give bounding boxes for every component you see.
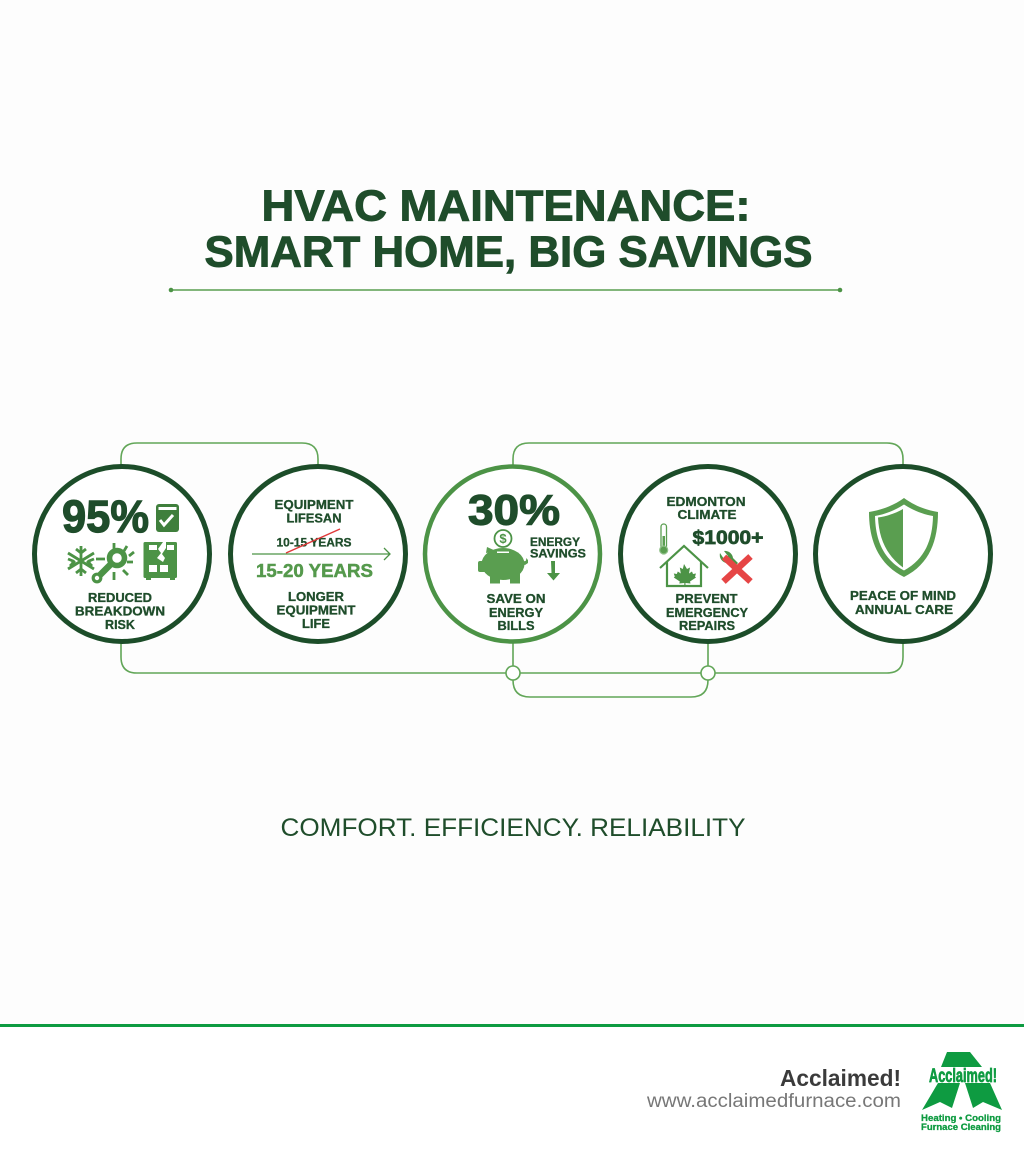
logo: Heating • Cooling: [921, 1113, 1001, 1124]
caption: PEACE OF MIND: [850, 589, 956, 603]
title underline: [169, 288, 842, 292]
old lifespan struck through: [276, 529, 352, 553]
label: energy savings: [530, 537, 586, 560]
icon: snowflake: [68, 546, 94, 576]
heading: [666, 495, 746, 522]
caption: [486, 592, 546, 633]
caption: [276, 590, 356, 631]
title: SMART HOME, BIG SAVINGS: [204, 228, 812, 276]
panel: peace of mind: [816, 466, 990, 642]
logo: [921, 1052, 1002, 1133]
caption: LONGER: [288, 590, 344, 604]
footer: [0, 1024, 1024, 1154]
icon: checklist: [156, 504, 179, 532]
panel: longer equipment life: [230, 466, 406, 642]
caption: ANNUAL CARE: [855, 603, 953, 617]
icon: dollar coin: [494, 530, 512, 547]
icon: piggy bank: [478, 547, 528, 584]
logo: Furnace Cleaning: [921, 1122, 1001, 1133]
tagline: COMFORT. EFFICIENCY. RELIABILITY: [280, 814, 746, 842]
caption: [850, 589, 956, 617]
caption: [75, 591, 165, 632]
title: [204, 182, 812, 276]
heading: LIFESAN: [286, 512, 342, 526]
connector lines: [121, 443, 903, 697]
arrow: [252, 548, 390, 560]
caption: LIFE: [302, 617, 330, 631]
caption: BREAKDOWN: [75, 604, 165, 618]
panel: prevent emergency repairs: [620, 466, 796, 642]
icon: shield: [869, 498, 938, 577]
stat: 30%: 30%: [468, 486, 560, 534]
stat: 95%: 95%: [62, 491, 149, 542]
heading: [274, 498, 354, 526]
brand name: Acclaimed!: [780, 1065, 901, 1091]
label: energy savings: SAVINGS: [530, 548, 586, 560]
heading: CLIMATE: [678, 508, 736, 522]
caption: REPAIRS: [679, 619, 735, 633]
icon: dollar coin: $: [499, 531, 507, 546]
caption: ENERGY: [489, 606, 544, 620]
website: www.acclaimedfurnace.com: [646, 1091, 901, 1112]
icon: house with maple leaf: [660, 546, 708, 587]
icon: down arrow: [547, 561, 560, 580]
caption: [666, 592, 749, 633]
title: HVAC MAINTENANCE:: [262, 182, 750, 230]
caption: PREVENT: [676, 592, 738, 606]
caption: EQUIPMENT: [276, 604, 356, 618]
icon: thermometer: [660, 524, 668, 554]
icon: wrench and sun: [93, 543, 134, 582]
caption: REDUCED: [88, 591, 152, 605]
stat: $1000+: $1000+: [692, 527, 764, 549]
icon: wrench crossed out: [720, 551, 750, 582]
heading: EDMONTON: [666, 495, 746, 509]
panel: save on energy bills: [425, 466, 600, 642]
heading: EQUIPMENT: [274, 498, 354, 512]
caption: SAVE ON: [486, 592, 546, 606]
caption: EMERGENCY: [666, 606, 749, 620]
icon: broken furnace: [144, 542, 177, 580]
panel: reduced breakdown risk: [34, 466, 210, 642]
caption: RISK: [105, 618, 135, 632]
new lifespan: 15-20 YEARS: [256, 560, 373, 581]
old lifespan struck through: 10-15 YEARS: [276, 536, 352, 550]
label: energy savings: ENERGY: [530, 537, 580, 549]
caption: BILLS: [498, 619, 534, 633]
